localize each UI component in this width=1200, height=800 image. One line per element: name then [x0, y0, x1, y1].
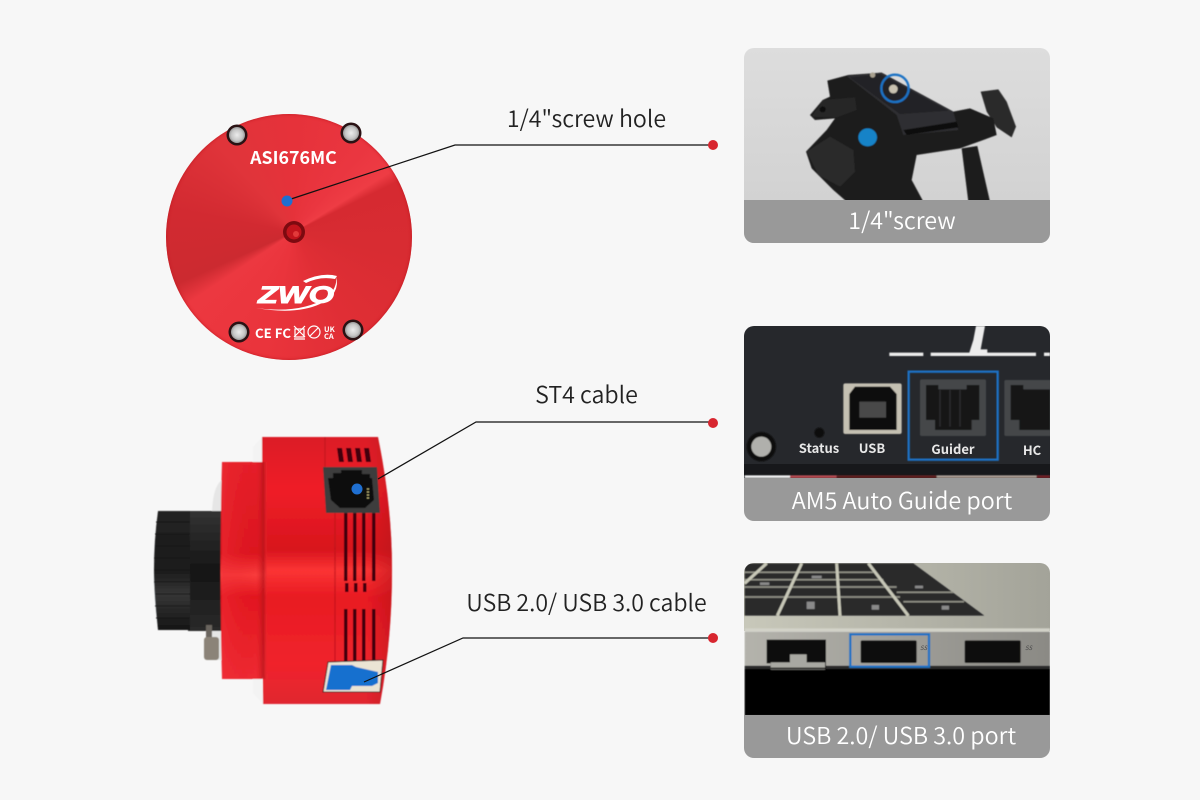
caption: USB 2.0/ USB 3.0 port: [786, 717, 1016, 751]
icon: compliance marks: CA: [324, 331, 334, 342]
port marks: SS: [920, 643, 928, 652]
ST4 port: [323, 467, 380, 513]
certification marks: CE FC: [255, 323, 291, 342]
logo: ZWO: ZWO: [257, 282, 334, 309]
red main body: [262, 437, 392, 704]
leader line: [288, 145, 712, 200]
label: screw hole: 1/4"screw hole: [507, 100, 666, 134]
white highlight beside body: [253, 437, 263, 704]
icon: compliance marks: UK: [324, 324, 336, 335]
photo: mount ports: [745, 326, 1054, 478]
strip: [790, 475, 837, 478]
callout: ST4 cable: [352, 418, 718, 494]
caption band: [744, 478, 1050, 521]
USB port: [843, 383, 902, 434]
leader line: [364, 638, 712, 682]
lens glass: [154, 513, 162, 628]
keyboard: [745, 563, 984, 616]
caption band: [744, 200, 1050, 243]
port marks: SS: [1025, 643, 1033, 652]
panel: camera back disk: [166, 114, 412, 360]
callout: screw hole: [282, 140, 718, 206]
photo: tripod head: [806, 72, 1016, 202]
red front section: [220, 462, 266, 679]
body edge shading: [262, 437, 392, 704]
ethernet port: [767, 640, 826, 670]
blue marker: [282, 196, 292, 206]
USB port: [323, 660, 383, 692]
icon: compliance marks: [294, 324, 336, 342]
photo: laptop keys and ports: [745, 563, 1050, 716]
screw: [747, 432, 776, 461]
callout: USB cable: [364, 633, 718, 682]
red marker: [708, 418, 718, 428]
logo: ZWO: [256, 275, 337, 311]
icon: centre hole: [283, 221, 305, 243]
port marks: [920, 646, 1032, 650]
ports strip: [745, 632, 1050, 666]
status led: [814, 428, 824, 438]
USB port A: [861, 640, 917, 663]
panel: laptop USB port: [744, 563, 1050, 758]
caption: AM5 Auto Guide port: [792, 482, 1013, 516]
port labels: Guider: [931, 439, 975, 458]
caption band: [744, 715, 1050, 758]
panel: tripod screw: [744, 48, 1050, 243]
port labels: HC: [1023, 440, 1042, 459]
cooling slots: [337, 448, 376, 661]
red marker: [708, 140, 718, 150]
port labels: Status: [799, 438, 839, 457]
port labels: [799, 443, 1041, 455]
blue marker: [352, 484, 362, 494]
lens knurled ring: [154, 511, 190, 630]
icon: thumb screw: [204, 625, 219, 660]
port labels: USB: [859, 438, 885, 457]
lens barrel: [188, 511, 224, 631]
disk details: screws, model name, logo: [226, 122, 364, 342]
HC socket: [1004, 380, 1054, 436]
label: USB cable: USB 2.0/ USB 3.0 cable: [466, 584, 707, 618]
leader line: [378, 422, 712, 479]
icon: screws: [226, 122, 364, 342]
red marker: [708, 633, 718, 643]
USB port B: [965, 640, 1021, 663]
panel: AM5 guide port: [744, 326, 1054, 521]
label: ST4 cable: ST4 cable: [535, 376, 638, 410]
white decoration: [889, 326, 1050, 356]
caption: 1/4"screw: [848, 202, 956, 236]
highlight box: [909, 372, 998, 460]
model name: ASI676MC: [249, 144, 337, 170]
Guider socket: [920, 379, 986, 436]
lens mount silver ring: [212, 480, 226, 660]
camera side view: [154, 437, 392, 704]
body groove: [325, 437, 335, 662]
highlight box: [850, 634, 929, 667]
